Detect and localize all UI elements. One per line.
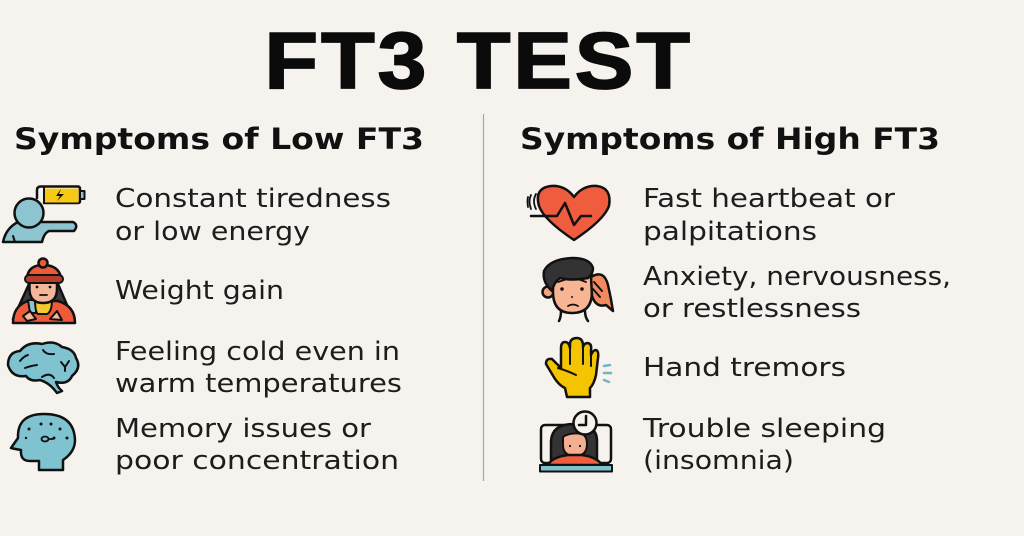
title: FT3 TEST — [264, 16, 693, 105]
text: constant tiredness: Constant tiredness — [115, 184, 391, 214]
text: anxiety: Anxiety, nervousness, — [643, 262, 951, 292]
heading: high FT3: Symptoms of High FT3 — [520, 122, 940, 156]
icon: head with scattered dots — [11, 414, 75, 470]
panel: symptoms of high FT3 — [520, 122, 951, 476]
text: constant tiredness: or low energy — [115, 217, 310, 247]
icon: bundled-up person in winter hat — [13, 258, 75, 323]
icon: heart with pulse — [528, 186, 610, 240]
panel: symptoms of low FT3 — [3, 122, 424, 476]
text: fast heartbeat: palpitations — [643, 217, 817, 247]
icon: worried man holding head — [542, 258, 613, 321]
text: memory issues: Memory issues or — [115, 414, 371, 444]
heading: low FT3: Symptoms of Low FT3 — [14, 122, 424, 156]
text: trouble sleeping: Trouble sleeping — [642, 414, 886, 444]
text: hand tremors: Hand tremors — [643, 353, 846, 383]
icon: trembling hand — [546, 338, 611, 397]
text: fast heartbeat: Fast heartbeat or — [643, 184, 895, 214]
text: memory issues: poor concentration — [115, 446, 399, 476]
text: feeling cold: Feeling cold even in — [115, 337, 400, 367]
icon: person awake in bed with clock — [540, 412, 612, 472]
icon: brain — [8, 343, 78, 393]
icon: tired person with low battery — [3, 186, 84, 242]
text: feeling cold: warm temperatures — [115, 369, 402, 399]
text: anxiety: or restlessness — [643, 294, 861, 324]
text: weight gain: Weight gain — [115, 276, 284, 306]
text: trouble sleeping: (insomnia) — [643, 446, 794, 476]
